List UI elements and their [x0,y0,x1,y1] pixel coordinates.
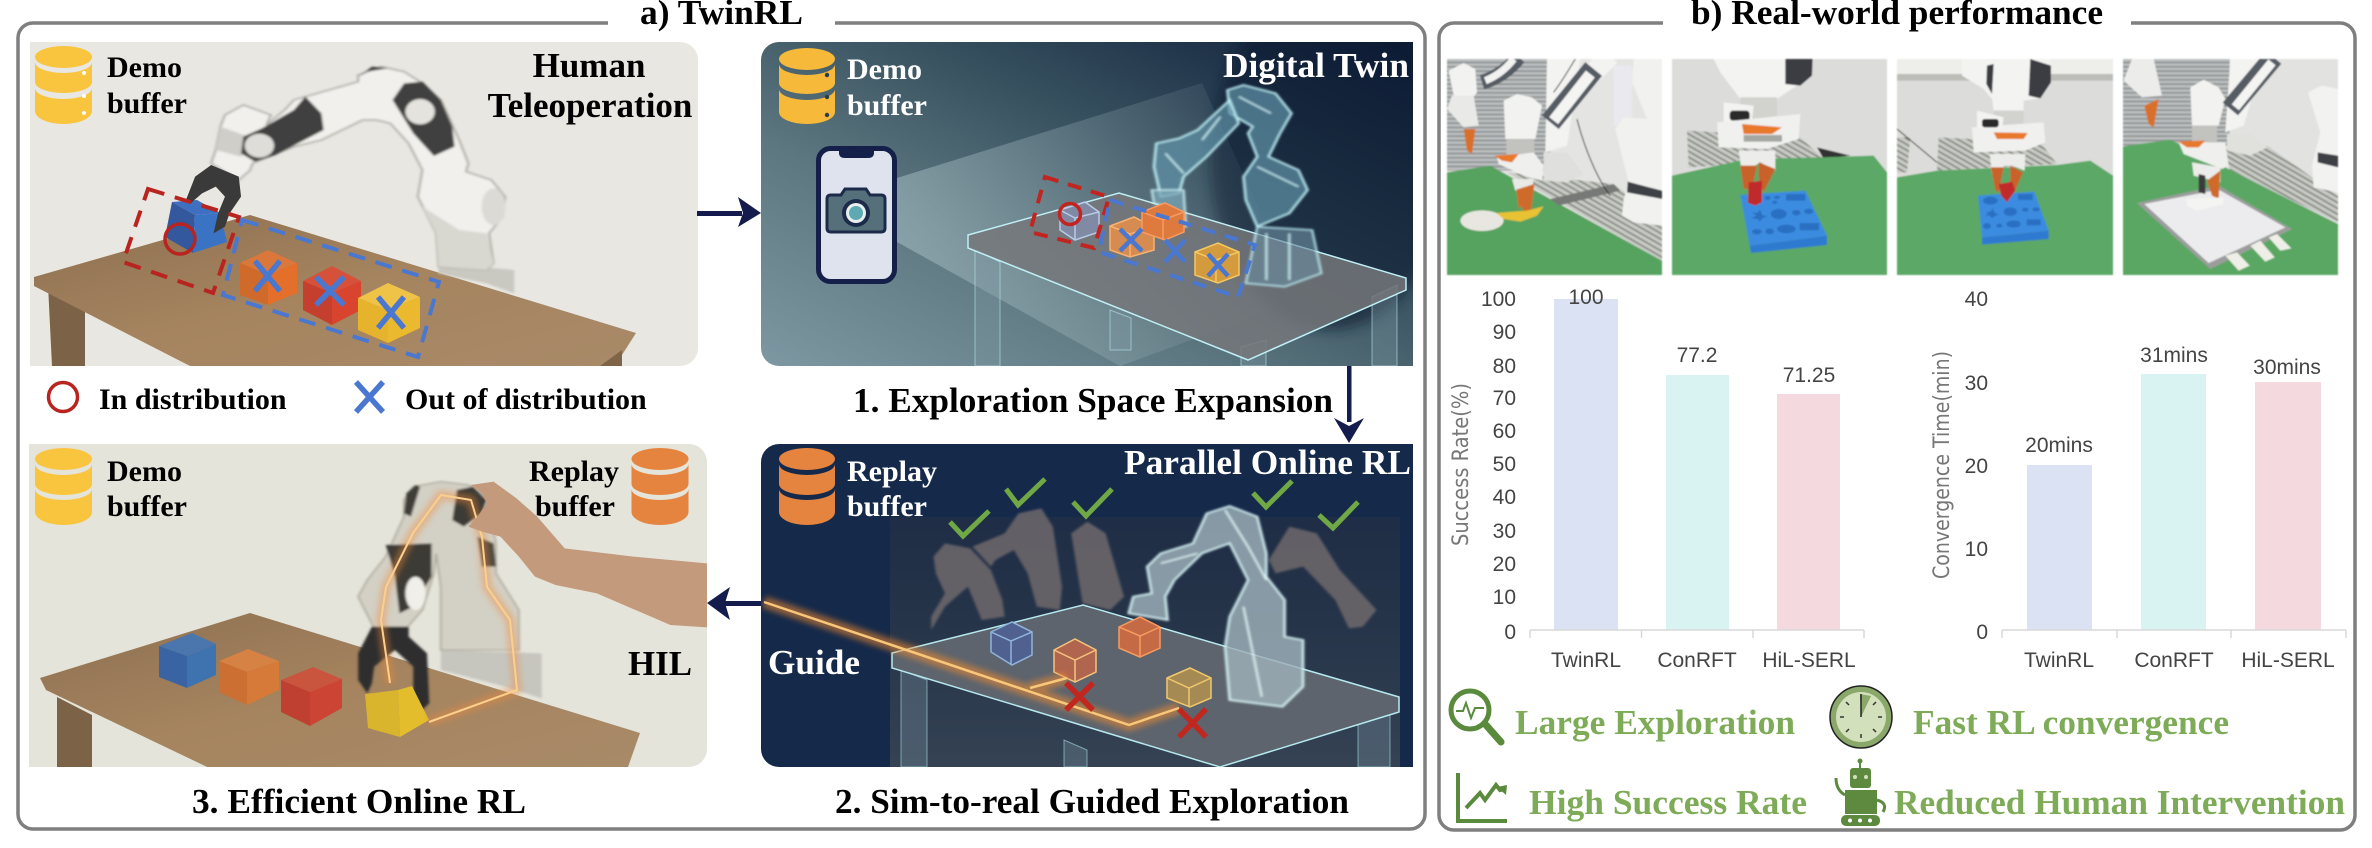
label: demo buffer: buffer [847,89,927,122]
bar chart: success rate [1449,286,1864,672]
label: parallel online RL: Parallel Online RL [1124,443,1411,482]
holographic table [968,193,1406,366]
icon: demo buffer [35,46,92,124]
dashed regions and marks [1030,177,1255,297]
glowing trajectory [381,495,517,722]
glass box [890,517,1400,767]
label: demo buffer: buffer [107,490,187,523]
camera beam [897,83,1247,366]
y-axis labels: 0 [1504,621,1516,644]
y-axis labels: 50 [1493,453,1516,476]
y-axis labels [1481,288,1516,644]
icon: demo buffer [779,48,835,124]
heading: step 1: 1. Exploration Space Expansion [853,381,1333,420]
y-axis labels: 40 [1965,288,1988,311]
category labels: TwinRL [2024,649,2094,672]
label: demo buffer: Demo [847,53,922,86]
panel frame: b) Real-world performance [1439,23,2355,830]
y-axis labels: 90 [1493,321,1516,344]
y-axis labels: 100 [1481,288,1516,311]
panel frame: a) TwinRL [18,23,1425,829]
panel: efficient online RL [29,444,707,767]
photos: banana and peg tasks [1447,56,1887,275]
icon: replay buffer [632,448,688,525]
label: replay buffer: buffer [535,490,615,523]
label: high success rate: High Success Rate [1529,783,1807,822]
y-axis title: Convergence Time(min) [1930,351,1955,579]
label: fast RL convergence: Fast RL convergence [1913,703,2229,742]
photos: peg close-up and board tasks [1897,57,2338,275]
y-axis labels: 60 [1493,420,1516,443]
category labels: ConRFT [1657,649,1737,672]
y-axis labels: 0 [1976,621,1988,644]
y-axis labels: 10 [1965,538,1988,561]
value labels: 77.2 [1677,344,1717,367]
heading: step 3: 3. Efficient Online RL [192,782,526,821]
holographic robot [1152,85,1321,287]
cubes [240,250,420,343]
legend: Out of distribution [405,383,647,416]
arrow: step 0 to digital twin [697,197,761,227]
y-axis labels: 80 [1493,355,1516,378]
cubes [159,633,429,737]
category labels: TwinRL [1551,649,1621,672]
y-axis labels: 40 [1493,486,1516,509]
table [40,613,640,767]
label: reduced human intervention: Reduced Human Intervention [1894,783,2345,822]
value labels: 71.25 [1783,364,1835,387]
label: human teleoperation: Human [533,46,645,85]
arrow: digital twin to parallel RL [1334,366,1364,443]
photo: peg insertion close [1897,59,2113,275]
label: replay buffer: Replay [847,455,937,488]
in-distribution dashed region [123,189,239,293]
y-axis labels: 30 [1965,372,1988,395]
value labels: 20mins [2025,434,2093,457]
y-axis labels: 10 [1493,586,1516,609]
label: replay buffer: Replay [529,455,619,488]
bar chart: convergence time [1930,288,2346,672]
label: replay buffer: buffer [847,490,927,523]
label: demo buffer: Demo [107,455,182,488]
icon: phone camera [818,148,894,282]
value labels: 30mins [2253,356,2321,379]
value labels [2025,344,2321,457]
y-axis labels: 20 [1965,455,1988,478]
y-axis labels: 20 [1493,553,1516,576]
icon: demo buffer [35,448,92,525]
blue cube with gripper [165,165,241,253]
human hand [468,482,707,627]
success checks [950,479,1358,536]
panel: human teleoperation [30,42,698,366]
photo: banana on plate [1447,56,1662,275]
cubes [991,617,1211,707]
category labels: HiL-SERL [1762,649,1856,672]
label: demo buffer: Demo [107,51,182,84]
value labels [1568,286,1835,387]
label: HIL: HIL [628,644,692,683]
label: guide: Guide [768,643,860,682]
failure marks [1066,683,1206,737]
table [34,215,636,366]
label: digital twin: Digital Twin [1223,46,1409,85]
icon: magnifier [1451,691,1501,742]
table [892,605,1399,767]
bars [2027,374,2321,630]
legend: In distribution [99,383,287,416]
robot arm [358,482,542,712]
value labels: 100 [1568,286,1604,309]
out-of-distribution dashed region [223,220,439,357]
icon: clock [1830,686,1892,748]
panel: digital twin [761,42,1413,366]
category labels: HiL-SERL [2241,649,2335,672]
category labels: ConRFT [2134,649,2214,672]
icon: trending chart [1458,773,1507,821]
label: human teleoperation: Teleoperation [488,86,692,125]
legend [48,382,647,416]
y-axis title: Success Rate(%) [1449,383,1474,546]
category labels [2024,649,2335,672]
photo: wiping board [2123,57,2338,275]
icon: replay buffer [779,448,835,525]
panel: parallel online RL [761,443,1413,767]
arrow: parallel RL to efficient online RL [707,587,761,620]
photo: peg insertion wide [1672,59,1887,275]
ghost robots [931,508,1377,630]
y-axis labels: 30 [1493,520,1516,543]
bars [1554,299,1840,630]
main robot [1129,506,1303,707]
heading: step 2: 2. Sim-to-real Guided Exploration [835,782,1349,821]
y-axis labels [1965,288,1988,644]
holographic cubes [1060,202,1239,283]
value labels: 31mins [2140,344,2208,367]
y-axis labels: 70 [1493,387,1516,410]
label: large exploration: Large Exploration [1515,703,1795,742]
glowing guide line [764,602,1179,725]
category labels [1551,649,1856,672]
label: demo buffer: buffer [107,87,187,120]
robot arm [211,67,514,293]
icon: robot [1836,758,1885,826]
